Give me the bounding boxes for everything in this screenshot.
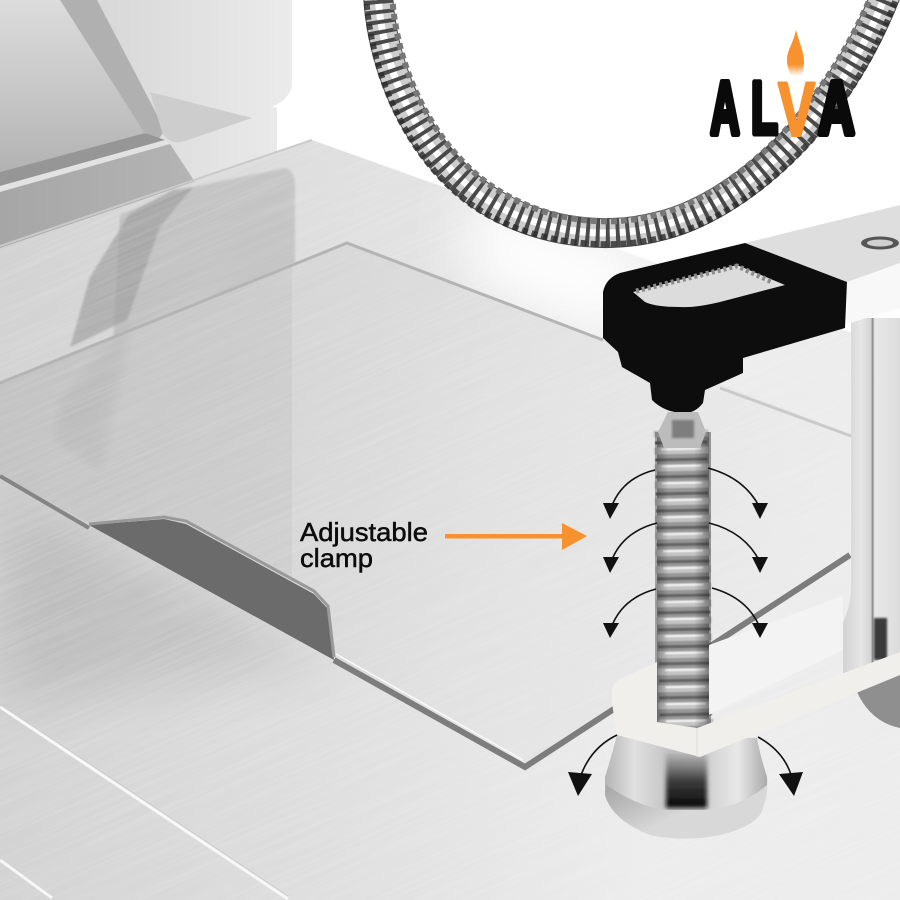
arrow row 3 left (603, 589, 656, 638)
arrow row 3 right (712, 588, 768, 638)
head window (633, 265, 785, 307)
table back rim (0, 140, 312, 246)
rod top nut (658, 412, 706, 448)
arrow row 1 left (603, 470, 655, 519)
lid shadow (150, 92, 252, 142)
arm front face (847, 263, 900, 324)
back reflection (110, 168, 295, 400)
notch rim (89, 517, 334, 657)
flexible gooseneck hose (366, 0, 898, 244)
front edges of glass (0, 476, 89, 528)
inner window (0, 0, 145, 172)
post flange (843, 585, 900, 685)
logo letter A second: A (818, 66, 854, 150)
post reflection (70, 187, 193, 347)
glass plate (0, 243, 851, 767)
glass reflection (55, 320, 130, 470)
notch shadow (89, 519, 334, 660)
clamp foot and pad (605, 596, 900, 838)
post base (856, 670, 900, 728)
callout label: Adjustable clamp (300, 517, 428, 573)
logo letter A: A (710, 66, 740, 150)
rotation arrows (568, 468, 803, 796)
rear edge of glass (0, 243, 603, 383)
glass shade at left (0, 265, 292, 590)
mounting post (843, 318, 900, 728)
arrow row 2 right (709, 523, 768, 573)
glass brushed texture (0, 243, 850, 765)
logo letter L: L (751, 66, 778, 150)
knob dark reflection (666, 752, 707, 808)
knob lower ring (605, 785, 767, 838)
clamp arm (745, 205, 900, 324)
shading along front edge (0, 494, 292, 703)
dark lower band (0, 133, 165, 186)
arm screw (861, 236, 899, 250)
threaded clamp rod (655, 412, 711, 728)
callout label: Adjustable clamp: Adjustable (300, 517, 428, 547)
knob arrow left (568, 735, 617, 796)
front pad band (612, 652, 900, 757)
orange callout arrow (445, 523, 587, 550)
logo flame (787, 30, 804, 76)
arrow row 1 right (708, 468, 768, 519)
white pad top (709, 596, 843, 715)
black rubber clamp head (603, 243, 847, 413)
diagonal frame (60, 0, 165, 140)
knob arrow right (758, 737, 803, 796)
callout label: Adjustable clamp: clamp (300, 543, 373, 573)
highlight behind clamp head (460, 208, 634, 328)
steel knob (605, 735, 767, 838)
arm top surface (745, 205, 900, 283)
ALVA logo (710, 30, 854, 152)
table front seams (0, 704, 288, 899)
logo letter V: V (778, 68, 815, 152)
arrow row 2 left (603, 523, 657, 573)
back panel of the machine (0, 0, 292, 260)
